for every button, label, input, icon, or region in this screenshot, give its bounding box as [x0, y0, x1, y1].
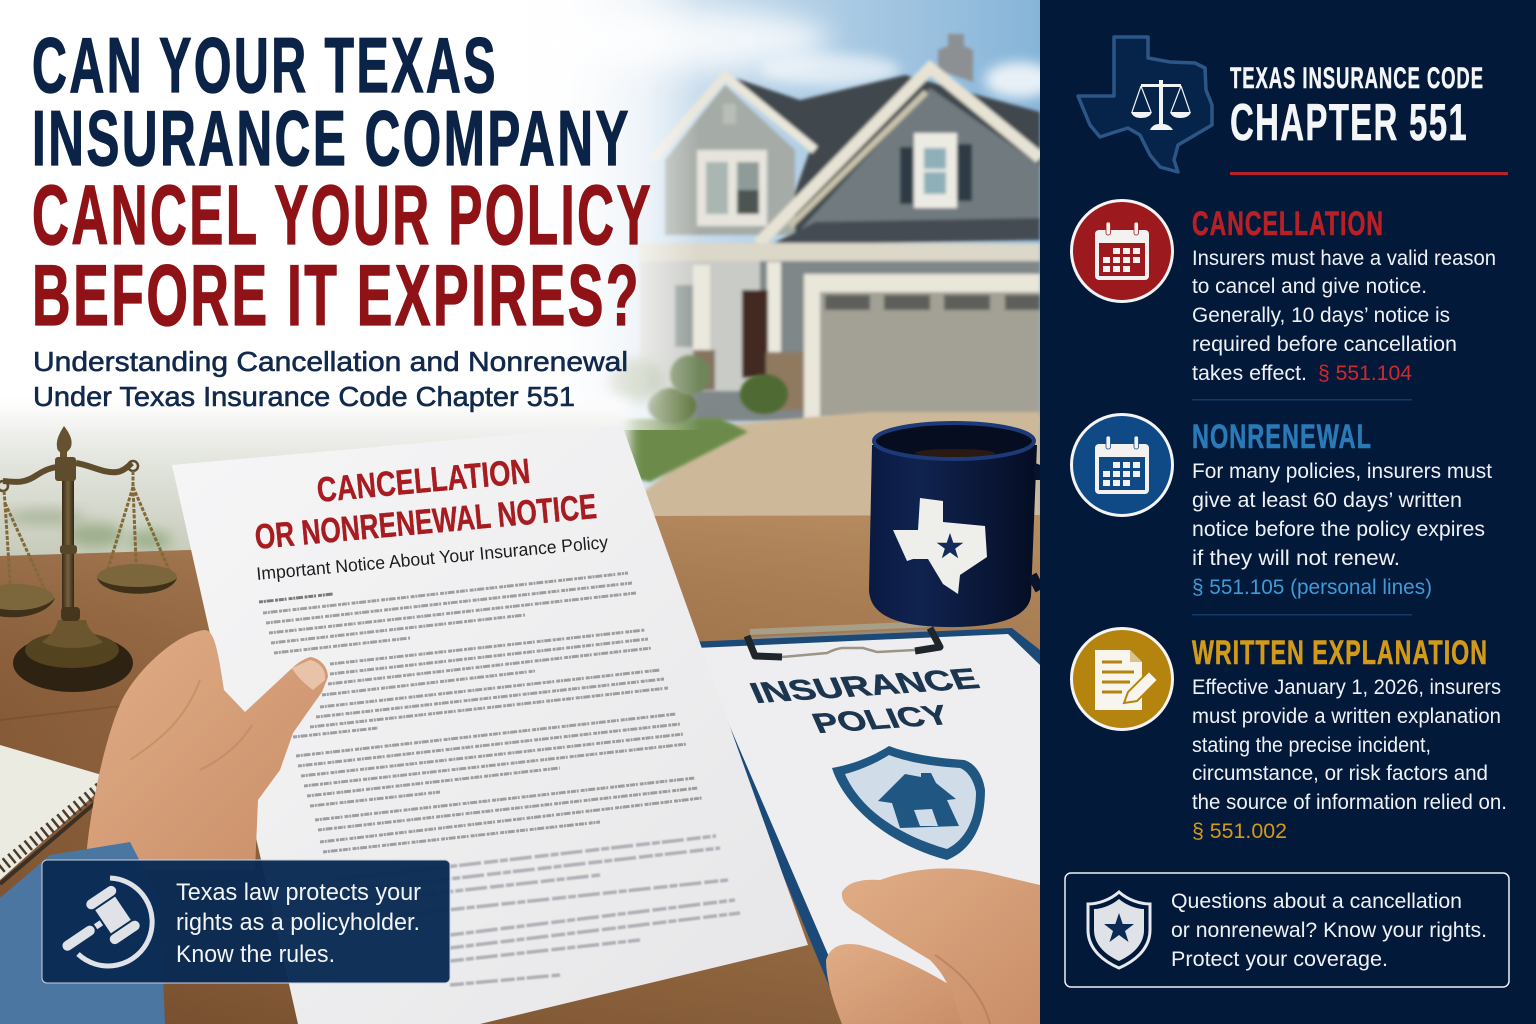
photo: blurred house [640, 34, 1040, 421]
policy sheet [696, 634, 1040, 1024]
icon: shield with house [832, 746, 985, 860]
written explanation body: Effective January 1, 2026, insurers [1192, 676, 1501, 699]
scale base [13, 620, 133, 692]
notice title: OR NONRENEWAL NOTICE [253, 487, 598, 557]
nonrenewal body: notice before the policy expires [1192, 518, 1485, 541]
notebook [0, 745, 102, 884]
upper double window [697, 150, 767, 226]
scale finial [57, 426, 72, 457]
wooden table [0, 515, 1040, 1024]
emblem star [937, 533, 963, 558]
headline: INSURANCE COMPANY [32, 94, 631, 182]
lower roof [770, 218, 1040, 245]
headline [32, 21, 653, 344]
icon: gavel [49, 878, 152, 970]
mug opening [874, 423, 1034, 459]
notice subtitle: Important Notice About Your Insurance Policy [256, 532, 609, 584]
scale column [55, 457, 80, 621]
headline: CAN YOUR TEXAS [32, 21, 498, 109]
hazy field behind brass scale [0, 400, 630, 570]
porch columns and door [675, 262, 804, 410]
nonrenewal heading: NONRENEWAL [1192, 418, 1372, 456]
sidebar heading [1230, 62, 1484, 152]
cancellation body: to cancel and give notice. [1192, 275, 1427, 298]
mug handle [1032, 468, 1040, 590]
clipboard title: POLICY [808, 700, 955, 740]
section: written explanation [1072, 628, 1507, 843]
cancellation body: takes effect. [1192, 362, 1307, 385]
callout text: Questions about a cancellation [1171, 890, 1462, 913]
house roofs [735, 75, 1040, 235]
clipboard title [745, 663, 984, 740]
callout text: Know the rules. [176, 941, 335, 968]
written explanation body: stating the precise incident, [1192, 734, 1431, 757]
left gable trim [652, 76, 815, 160]
section: nonrenewal [1072, 414, 1492, 599]
icon: gold document with pencil [1072, 628, 1172, 730]
left hand holding notice [85, 630, 328, 870]
metal clip [747, 624, 940, 657]
callout text: rights as a policyholder. [176, 909, 420, 936]
callout box [42, 860, 450, 983]
clipboard board [686, 628, 1040, 1024]
callout text: or nonrenewal? Know your rights. [1171, 919, 1487, 942]
cancellation body [1192, 247, 1496, 385]
nonrenewal body: give at least 60 days’ written [1192, 489, 1462, 512]
callout: know your rights [1065, 873, 1509, 987]
scale beam [3, 463, 132, 482]
icon: red calendar [1072, 200, 1172, 302]
panel background [1040, 0, 1536, 1024]
panel: Texas Insurance Code sidebar [1040, 0, 1536, 1024]
icon: blue calendar [1072, 414, 1172, 516]
callout: Texas law protects your rights [42, 860, 450, 983]
right gable window [900, 133, 972, 208]
callout box [1065, 873, 1509, 987]
left gable vent [723, 104, 736, 124]
callout text [176, 879, 421, 968]
cancellation body: required before cancellation [1192, 333, 1457, 356]
icon: Texas outline with scales [1078, 37, 1212, 172]
left gable wall [665, 85, 795, 235]
callout text [1171, 890, 1487, 971]
garage [804, 274, 1040, 420]
shirt sleeve [0, 842, 165, 1024]
written explanation body: § 551.002 [1192, 820, 1287, 843]
icon: shield with star [1088, 892, 1150, 968]
clipboard with insurance policy [686, 624, 1040, 1024]
coffee surface [915, 449, 995, 457]
notice title: CANCELLATION [315, 452, 532, 510]
cancellation body: Generally, 10 days’ notice is [1192, 304, 1450, 327]
fascia [640, 243, 1040, 261]
clipboard title: INSURANCE [745, 663, 984, 710]
thumb nail [292, 660, 325, 690]
right gable trim [758, 68, 1040, 244]
heading rule [1230, 172, 1508, 175]
photo: driveway, lawn and shrubs [565, 355, 1040, 525]
mug body [869, 445, 1037, 627]
chimney [938, 34, 973, 82]
nonrenewal body: For many policies, insurers must [1192, 460, 1492, 483]
subtitle: Understanding Cancellation and Nonrenewal [33, 346, 628, 377]
nonrenewal body: § 551.105 (personal lines) [1192, 576, 1432, 599]
cancellation notice document [172, 425, 808, 1024]
cancellation body: § 551.104 [1318, 362, 1412, 385]
paper sheet [172, 425, 808, 1024]
notice blurred lines [332, 836, 740, 985]
nonrenewal body [1192, 460, 1492, 599]
white fade behind headline [0, 0, 700, 430]
headline: CANCEL YOUR POLICY [32, 168, 653, 262]
callout text: Protect your coverage. [1171, 948, 1388, 971]
Texas emblem [893, 498, 987, 594]
written explanation body [1192, 676, 1507, 843]
nonrenewal body: if they will not renew. [1192, 547, 1400, 570]
coffee mug with Texas emblem [869, 423, 1040, 627]
subtitle [33, 346, 628, 412]
right hand [826, 868, 1040, 1024]
photo background: sky and clouds [0, 0, 1055, 560]
headline: BEFORE IT EXPIRES? [32, 248, 641, 344]
written explanation body: the source of information relied on. [1192, 791, 1507, 814]
notice fine print [259, 573, 702, 852]
cancellation heading: CANCELLATION [1192, 205, 1384, 243]
callout text: Texas law protects your [176, 879, 421, 906]
left pan and chains [0, 481, 55, 617]
written explanation body: must provide a written explanation [1192, 705, 1501, 728]
cancellation body: Insurers must have a valid reason [1192, 247, 1496, 270]
icon: brass scales of justice [0, 426, 177, 692]
written explanation body: circumstance, or risk factors and [1192, 762, 1488, 785]
lower wall [660, 261, 1040, 421]
right pan and chains [97, 461, 177, 594]
subtitle: Under Texas Insurance Code Chapter 551 [33, 381, 575, 412]
notice title [253, 452, 598, 557]
right gable wall [800, 88, 1040, 230]
section: cancellation [1072, 200, 1496, 385]
